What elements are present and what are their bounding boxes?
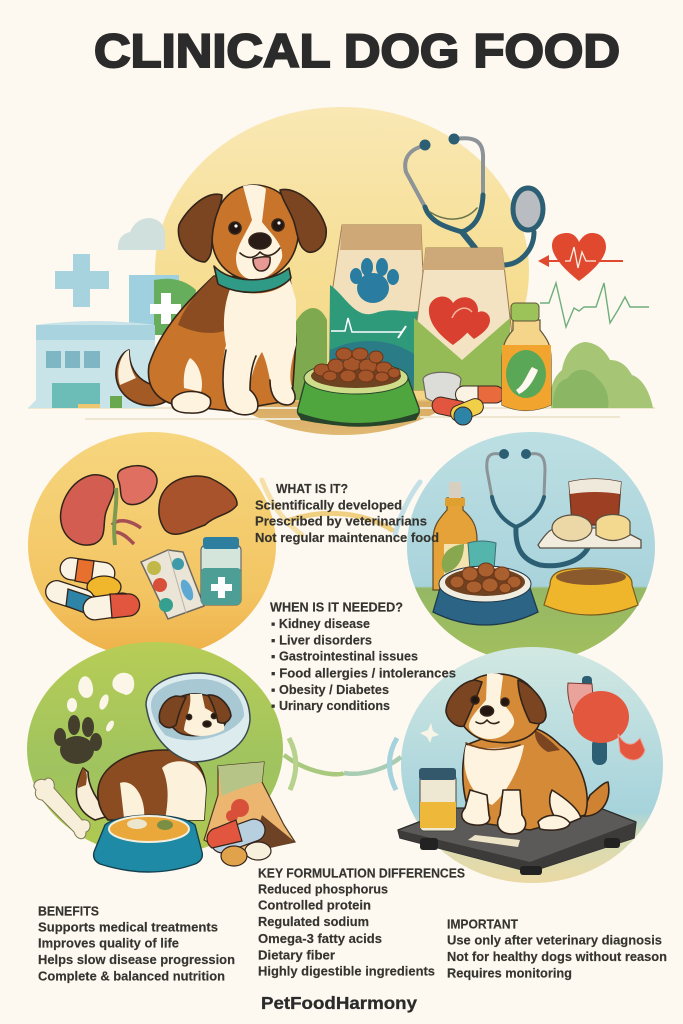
icon: paw print (54, 715, 102, 764)
scale (398, 808, 636, 875)
haunch white patch (184, 358, 202, 392)
bowl rim (304, 362, 408, 394)
haunch white (550, 790, 581, 826)
supplement bottle (502, 303, 551, 410)
nose (480, 706, 494, 716)
eyes (471, 696, 479, 704)
green pulse line (540, 283, 649, 327)
bottle label (444, 544, 477, 584)
back paw (172, 391, 211, 413)
brand name: PetFoodHarmony (261, 993, 417, 1013)
text block: important: IMPORTANT (447, 918, 518, 932)
text block: what is it: WHAT IS IT? (276, 482, 348, 496)
dog sitting (116, 185, 326, 415)
nose (249, 233, 271, 249)
teal circle (401, 647, 663, 883)
text block: when is it needed: ▪ Kidney disease (271, 617, 370, 631)
star (420, 723, 439, 743)
text block: when is it needed: ▪ Obesity / Diabetes (271, 683, 389, 697)
collar (214, 266, 291, 292)
leg outlines (223, 350, 295, 415)
blaze and muzzle (469, 673, 514, 739)
right bracket (389, 738, 397, 790)
teal cup (468, 541, 496, 570)
icon: blister pack (141, 550, 204, 619)
bottle label (506, 350, 546, 398)
panel: recovering dog with cone (27, 642, 295, 872)
connector between lower circles (284, 738, 401, 790)
text block: what is it (255, 482, 439, 545)
pills (207, 816, 271, 866)
text block: when is it needed: ▪ Liver disorders (271, 634, 372, 648)
text block: important: Not for healthy dogs without reason (447, 950, 667, 964)
text block: what is it: Not regular maintenance food (255, 531, 439, 545)
teal bowl (94, 815, 202, 872)
blue bowl with kibble (433, 563, 538, 625)
urine sample jar (419, 768, 456, 831)
text block: key formulation differences: Highly digestible ingredients (258, 964, 435, 978)
orange circle (28, 432, 276, 658)
text block: key formulation differences: Omega-3 fatty acids (258, 932, 382, 946)
chest (464, 745, 524, 805)
panel: dog on scale (398, 647, 663, 883)
bowl contents (556, 569, 626, 585)
icon: liver (159, 476, 237, 534)
icon: kidneys (61, 466, 157, 545)
text block: when is it needed: ▪ Urinary conditions (271, 699, 390, 713)
text block: important (447, 918, 667, 980)
food bowl with kibble (297, 348, 420, 426)
text block: benefits: Complete & balanced nutrition (38, 970, 225, 984)
mouth (476, 720, 499, 724)
text block: important: Requires monitoring (447, 966, 572, 980)
icon: cloud (118, 218, 165, 250)
panel: hero illustration (28, 107, 655, 435)
yellow bowl (544, 568, 638, 615)
icon: bush (550, 342, 653, 408)
tail (76, 768, 112, 820)
left bracket (289, 738, 296, 790)
text block: key formulation differences: Dietary fiber (258, 948, 335, 962)
panel: organs and medication (28, 432, 276, 658)
title: CLINICAL DOG FOOD (94, 24, 620, 77)
text block: benefits: Improves quality of life (38, 936, 179, 950)
head (212, 185, 298, 280)
dog sitting on scale (446, 673, 609, 834)
food bag: hearts (414, 248, 512, 390)
text block: key formulation differences: Reduced phosphorus (258, 882, 388, 896)
white puffs (67, 673, 134, 733)
small cup (423, 372, 461, 403)
icon: heart with arrow (538, 233, 623, 281)
connector arcs behind text (262, 480, 420, 535)
food bag: paw (329, 225, 424, 390)
collar (466, 743, 520, 750)
text block: when is it needed: WHEN IS IT NEEDED? (270, 600, 403, 614)
text block: when is it needed: ▪ Food allergies / intolerances (271, 666, 456, 680)
blue circle (407, 432, 655, 662)
tray with food (538, 514, 641, 548)
text block: benefits: Helps slow disease progression (38, 953, 235, 967)
food bag (204, 762, 295, 855)
body (148, 276, 296, 411)
front legs (462, 790, 490, 825)
cone collar (146, 673, 250, 762)
white chest and front legs (223, 280, 296, 415)
left ear (178, 194, 222, 262)
capsule pills (431, 386, 504, 425)
green circle (27, 642, 283, 856)
foliage behind dog (290, 308, 327, 400)
tail (581, 782, 609, 816)
dark back patch (178, 276, 236, 333)
ears (446, 680, 482, 726)
icon: stethoscope (487, 449, 588, 566)
icon: stethoscope (405, 134, 543, 265)
text block: key formulation differences: Controlled protein (258, 898, 371, 912)
icon: bladder organ (568, 676, 645, 765)
hero background circle (155, 107, 529, 435)
text block: benefits: Supports medical treatments (38, 920, 218, 934)
text block: when is it needed: ▪ Gastrointestinal issues (271, 650, 418, 664)
text block: when is it needed (270, 600, 456, 713)
text block: important: Use only after veterinary diagnosis (447, 934, 662, 948)
body (463, 727, 587, 830)
text block: key formulation differences: Regulated sodium (258, 915, 369, 929)
dog head in cone (159, 694, 231, 736)
bowl body (298, 378, 419, 426)
panel: food and vet tools (407, 432, 655, 662)
oil bottle (433, 482, 477, 590)
text block: key formulation differences: KEY FORMULATION DIFFERENCES (258, 866, 465, 880)
text block: what is it: Scientifically developed (255, 498, 402, 512)
eyes (229, 222, 241, 234)
floor line (28, 408, 655, 419)
back paw (538, 815, 570, 830)
icon: bone (34, 778, 90, 839)
icon: blue cross (55, 254, 109, 307)
head (458, 674, 541, 743)
text block: key formulation differences (258, 866, 465, 978)
glass of broth (569, 479, 621, 525)
hospital building (28, 275, 196, 408)
kibble (314, 348, 400, 382)
tail (116, 350, 165, 406)
text block: what is it: Prescribed by veterinarians (255, 514, 427, 528)
text block: benefits: BENEFITS (38, 904, 99, 918)
icon: paw print (350, 258, 399, 303)
blaze and muzzle (236, 185, 282, 280)
dog body (76, 750, 206, 820)
mouth (240, 248, 280, 257)
text block: benefits (38, 904, 235, 984)
icon: medicine jar (201, 537, 241, 605)
icon: capsules (43, 556, 140, 621)
right ear (280, 189, 326, 252)
